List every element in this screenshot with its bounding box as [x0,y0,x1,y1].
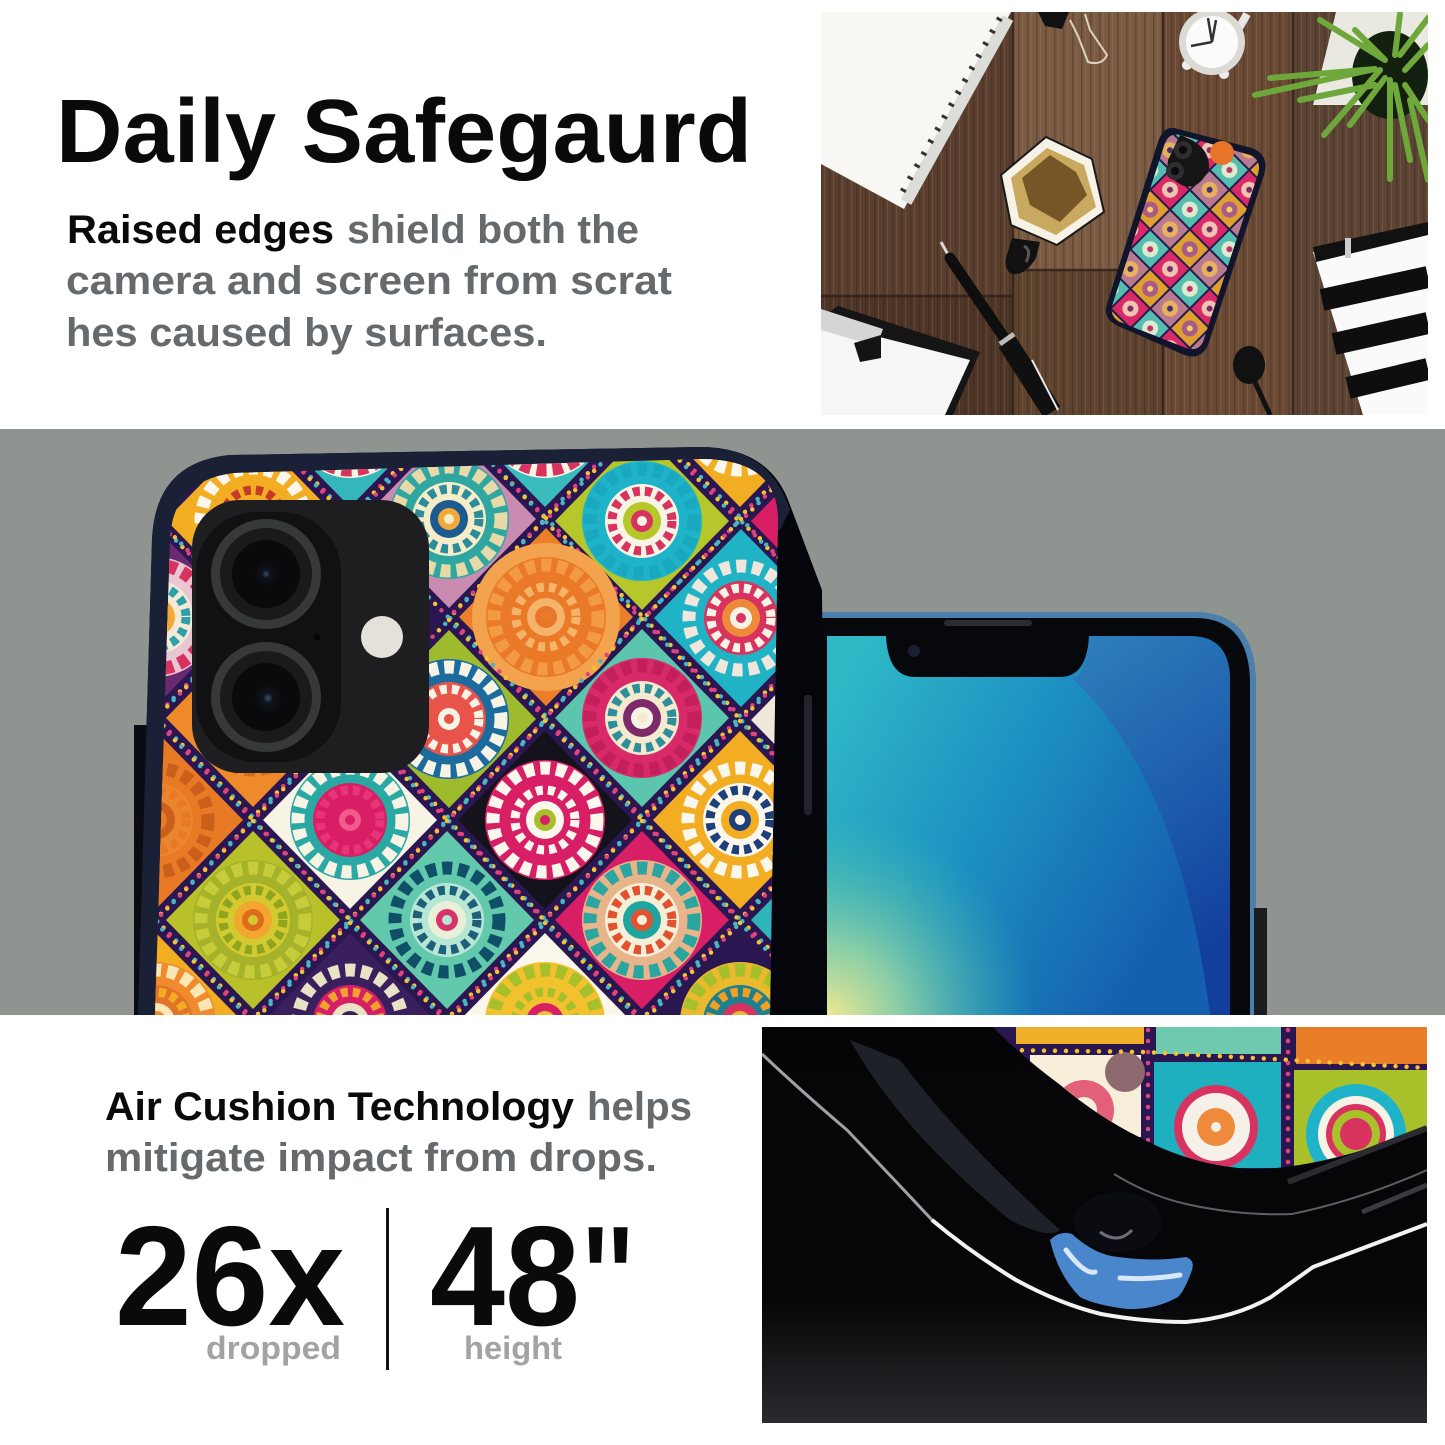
lens: lower [211,642,321,752]
clipboard [821,306,980,415]
striped notebook [1313,222,1428,415]
text block: raised edges description: hes caused by surfaces. [66,311,547,355]
text block: raised edges description: camera and screen from scrat [66,259,672,303]
text block: air cushion technology [105,1085,692,1180]
air cushion blue drop [1050,1192,1193,1309]
lens: upper [211,519,321,629]
title: Daily Safegaurd [56,82,752,182]
stat: 48 inch height: height [464,1330,562,1366]
text block: air cushion technology: helps [587,1085,692,1129]
text block: raised edges description: Raised edges [67,208,334,252]
coffee cup [1001,137,1104,274]
pen [941,242,1058,412]
phone screen [827,636,1230,1015]
clock [1179,9,1247,79]
photo: desk flat lay with phone [821,9,1428,416]
text block: air cushion technology: mitigate impact from drops. [105,1136,657,1180]
text block: raised edges description: shield both the [347,208,639,252]
case bumper [762,1054,1427,1322]
mosaic case phone [134,447,822,1015]
spoon [1233,346,1270,415]
stat: 48 inch height: 48 [430,1197,580,1356]
stat: 48 inch height: '' [583,1197,633,1356]
mosaic pattern corner [993,1027,1427,1169]
screen-side phone [800,612,1267,1015]
stat: 26x dropped: 26x [115,1197,345,1356]
plant [1255,12,1428,180]
binder clip [1038,12,1107,63]
camera island [192,500,429,773]
stat: 26x dropped: dropped [206,1330,341,1366]
text block: raised edges description [66,208,672,355]
mosaic pattern [155,459,778,1015]
photo: air cushion corner close-up [762,1027,1430,1423]
flash [361,616,403,658]
text block: air cushion technology: Air Cushion Technology [105,1085,575,1129]
panel: grey band with phones [0,429,1445,1015]
small phone with mosaic case [1100,125,1270,360]
notebook [821,12,1011,209]
